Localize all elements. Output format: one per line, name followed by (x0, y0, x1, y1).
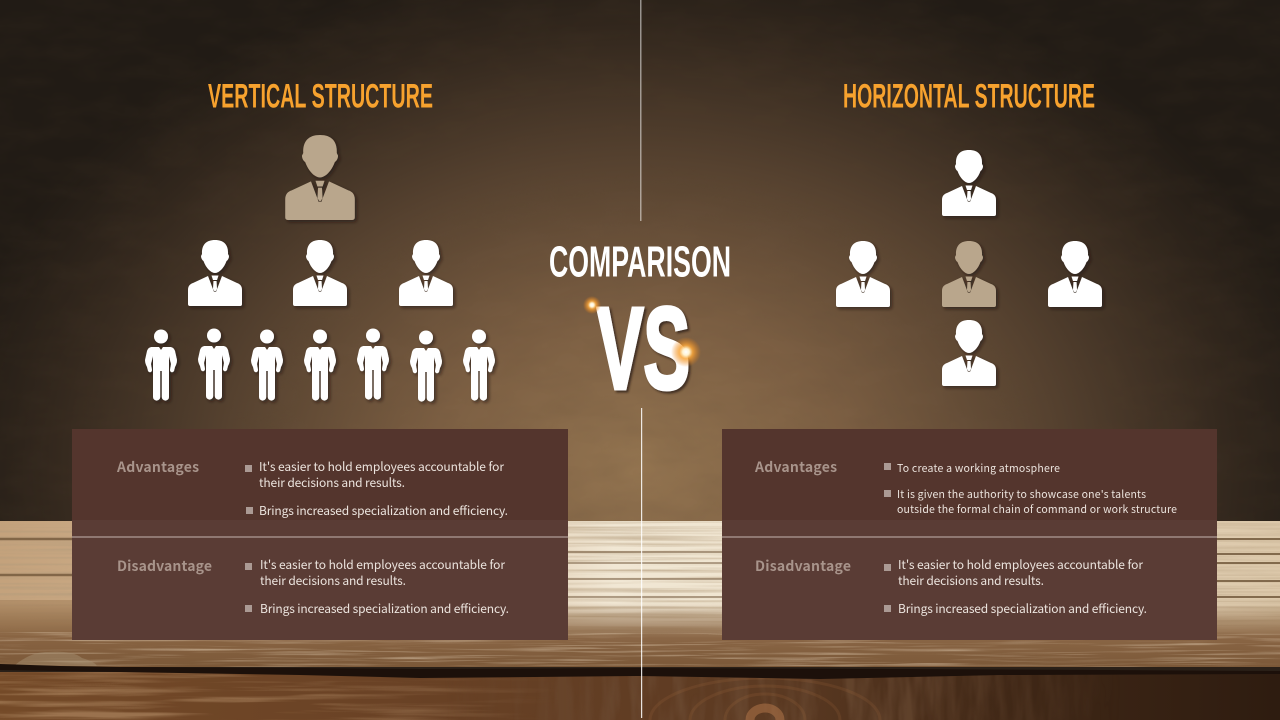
advantage list (245, 458, 508, 519)
wooden table (0, 521, 1280, 720)
heading: advantages: Advantages (116, 457, 199, 477)
title: vertical structure: VERTICAL STRUCTURE (208, 78, 433, 116)
disadvantage list (884, 556, 1147, 617)
icon: spark left (583, 296, 601, 314)
heading: disadvantage: Disadvantage (755, 556, 851, 576)
icon: central coordinator (942, 241, 996, 307)
middle manager tier (188, 240, 453, 306)
advantage list: To create a working atmosphere (897, 461, 1060, 476)
disadvantage list: It's easier to hold employees accountable for (898, 556, 1143, 573)
background wall (0, 0, 1280, 530)
heading: advantages: Advantages (754, 457, 837, 477)
panel: vertical pros and cons (72, 429, 568, 640)
advantage list (884, 461, 1177, 517)
heading: disadvantage: Disadvantage (117, 556, 212, 576)
disadvantage list (245, 556, 509, 617)
org chart: horizontal team (836, 150, 1102, 386)
center divider bottom (641, 408, 642, 718)
icon: top manager (285, 135, 355, 220)
org chart: vertical hierarchy (145, 135, 495, 402)
advantage list: their decisions and results. (259, 474, 405, 491)
team members (836, 150, 1102, 386)
VS mark (583, 284, 701, 414)
advantage list: Brings increased specialization and efficiency. (259, 502, 508, 519)
advantage list: It is given the authority to showcase one's talents (897, 487, 1146, 502)
panel: horizontal pros and cons (722, 429, 1217, 640)
icon: spark right (671, 337, 701, 367)
staff tier (145, 328, 495, 402)
disadvantage list: their decisions and results. (260, 572, 406, 589)
title: horizontal structure: HORIZONTAL STRUCTURE (843, 78, 1095, 116)
heading: comparison: COMPARISON (549, 238, 731, 286)
advantage list: It's easier to hold employees accountable for (259, 458, 504, 475)
disadvantage list: It's easier to hold employees accountable for (260, 556, 505, 573)
center divider top (640, 0, 642, 221)
advantage list: outside the formal chain of command or work structure (897, 502, 1177, 517)
disadvantage list: Brings increased specialization and efficiency. (260, 600, 509, 617)
VS mark: VS (597, 284, 690, 414)
disadvantage list: their decisions and results. (898, 572, 1044, 589)
disadvantage list: Brings increased specialization and efficiency. (898, 600, 1147, 617)
